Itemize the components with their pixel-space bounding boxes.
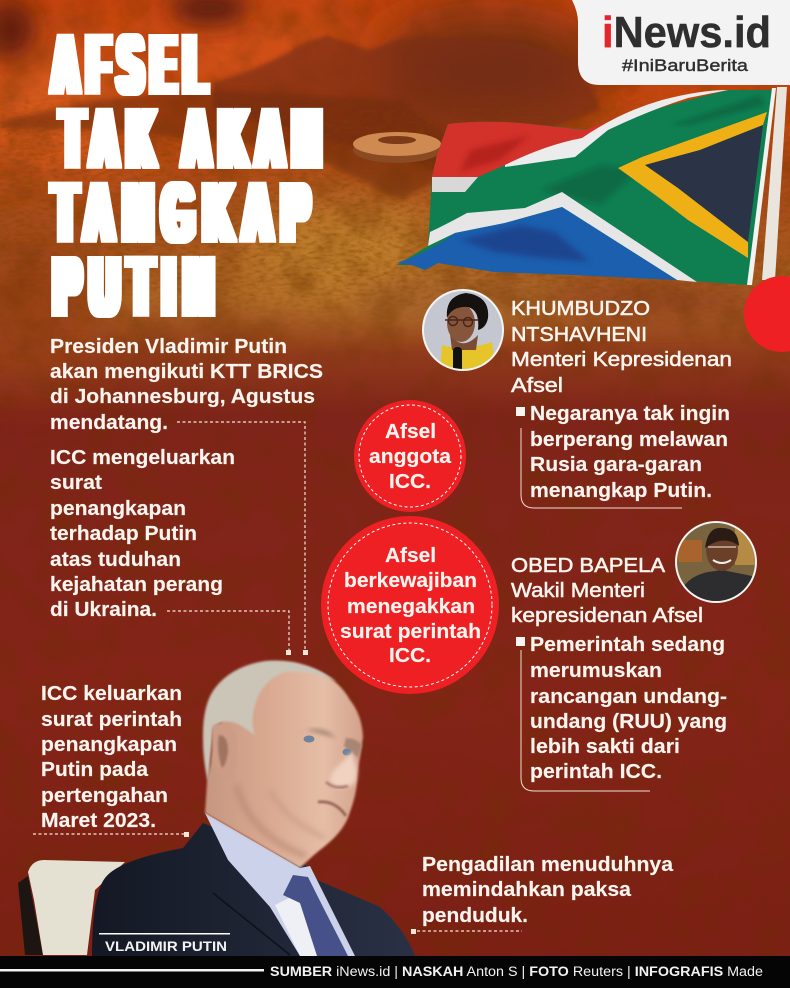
text block: ICC March 2023: penangkapan bbox=[41, 734, 177, 756]
circle: Afsel berkewajiban: menegakkan bbox=[347, 596, 475, 618]
text block: ICC warrant with connector bbox=[50, 447, 291, 655]
statement: Bapela bbox=[516, 634, 727, 791]
circle: Afsel anggota ICC: anggota bbox=[369, 446, 452, 468]
statement: Bapela: Pemerintah sedang bbox=[530, 634, 725, 656]
statement: Ntshavheni: Rusia gara-garan bbox=[530, 454, 702, 476]
caption: Vladimir Putin bbox=[99, 933, 230, 954]
text block: ICC warrant with connector: atas tuduhan bbox=[50, 549, 181, 571]
speaker: Khumbudzo Ntshavheni: Afsel bbox=[511, 375, 563, 397]
statement: Ntshavheni: menangkap Putin. bbox=[530, 480, 712, 502]
text: TAK AKAN bbox=[61, 92, 330, 186]
text block: ICC March 2023: Maret 2023. bbox=[41, 810, 156, 832]
speaker: Khumbudzo Ntshavheni bbox=[511, 298, 732, 397]
text block: ICC March 2023: surat perintah bbox=[41, 709, 182, 731]
text block: KTT BRICS with connector: mendatang. bbox=[50, 412, 168, 434]
statement: Bapela: lebih sakti dari bbox=[530, 736, 680, 758]
circle: Afsel berkewajiban bbox=[321, 516, 499, 694]
circle: Afsel berkewajiban: berkewajiban bbox=[344, 570, 477, 592]
speaker: Obed Bapela bbox=[511, 555, 703, 627]
footer credits bar: SUMBER iNews.id | NASKAH Anton S | FOTO Reuters | INFOGRAFIS Made bbox=[270, 964, 763, 979]
flag of South Africa with pole bbox=[397, 87, 787, 285]
circle: Afsel berkewajiban: Afsel bbox=[385, 545, 436, 567]
speaker: Khumbudzo Ntshavheni: KHUMBUDZO bbox=[511, 298, 650, 320]
text block: ICC March 2023 bbox=[33, 683, 189, 837]
text block: KTT BRICS with connector: akan mengikuti KTT BRICS bbox=[50, 361, 323, 383]
circle: Afsel anggota ICC bbox=[354, 400, 466, 512]
statement: Bapela: undang (RUU) yang bbox=[530, 711, 727, 733]
text block: forced transfer accusation: penduduk. bbox=[422, 905, 528, 927]
circle: Afsel anggota ICC: Afsel bbox=[385, 421, 436, 443]
portrait: Obed Bapela bbox=[675, 520, 760, 605]
logo iNews.id bbox=[572, 0, 790, 85]
speaker: Khumbudzo Ntshavheni: NTSHAVHENI bbox=[511, 324, 647, 346]
text: TANGKAP bbox=[53, 166, 319, 260]
text block: ICC warrant with connector: penangkapan bbox=[50, 498, 186, 520]
title bbox=[52, 18, 330, 334]
statement: Ntshavheni: berperang melawan bbox=[530, 429, 728, 451]
title: PUTIN bbox=[54, 240, 223, 334]
caption: Vladimir Putin: VLADIMIR PUTIN bbox=[105, 938, 227, 954]
logo iNews.id: #IniBaruBerita bbox=[622, 56, 749, 75]
speaker: Khumbudzo Ntshavheni: Menteri Kepresidenan bbox=[511, 349, 732, 371]
speaker: Obed Bapela: OBED BAPELA bbox=[511, 555, 666, 577]
text block: KTT BRICS with connector: di Johannesburg, Agustus bbox=[50, 386, 315, 408]
text block: ICC March 2023: pertengahan bbox=[41, 785, 168, 807]
statement: Bapela: merumuskan bbox=[530, 660, 662, 682]
circle: Afsel berkewajiban: ICC. bbox=[389, 645, 431, 667]
statement: Ntshavheni: Negaranya tak ingin bbox=[530, 403, 730, 425]
statement: Ntshavheni bbox=[516, 403, 730, 508]
photo: Vladimir Putin bbox=[18, 660, 415, 956]
text block: ICC March 2023: Putin pada bbox=[41, 759, 149, 781]
text block: forced transfer accusation bbox=[411, 854, 674, 934]
statement: Bapela: perintah ICC. bbox=[530, 761, 662, 783]
text block: ICC warrant with connector: kejahatan perang bbox=[50, 574, 223, 596]
text block: forced transfer accusation: memindahkan paksa bbox=[422, 879, 632, 901]
speaker: Obed Bapela: kepresidenan Afsel bbox=[511, 605, 703, 627]
red half circle bbox=[744, 276, 790, 352]
text block: ICC warrant with connector: ICC mengeluarkan bbox=[50, 447, 235, 469]
circle: Afsel anggota ICC: ICC. bbox=[389, 471, 431, 493]
text block: ICC warrant with connector: di Ukraina. bbox=[50, 599, 157, 621]
logo iNews.id: iNews.id bbox=[602, 8, 771, 57]
text block: forced transfer accusation: Pengadilan menuduhnya bbox=[422, 854, 674, 876]
footer credits bar bbox=[0, 956, 790, 988]
title: AFSEL bbox=[52, 18, 216, 112]
text block: ICC warrant with connector: surat bbox=[50, 472, 102, 494]
text block: ICC warrant with connector: terhadap Putin bbox=[50, 523, 197, 545]
circle: Afsel berkewajiban: surat perintah bbox=[340, 621, 481, 643]
landscape: mountain, town and stadium bbox=[0, 35, 790, 345]
text block: ICC March 2023: ICC keluarkan bbox=[41, 683, 182, 705]
text block: KTT BRICS with connector bbox=[50, 336, 323, 655]
text block: KTT BRICS with connector: Presiden Vladimir Putin bbox=[50, 336, 287, 358]
speaker: Obed Bapela: Wakil Menteri bbox=[511, 580, 645, 602]
statement: Bapela: rancangan undang- bbox=[530, 686, 727, 708]
portrait: Khumbudzo Ntshavheni bbox=[422, 289, 504, 371]
